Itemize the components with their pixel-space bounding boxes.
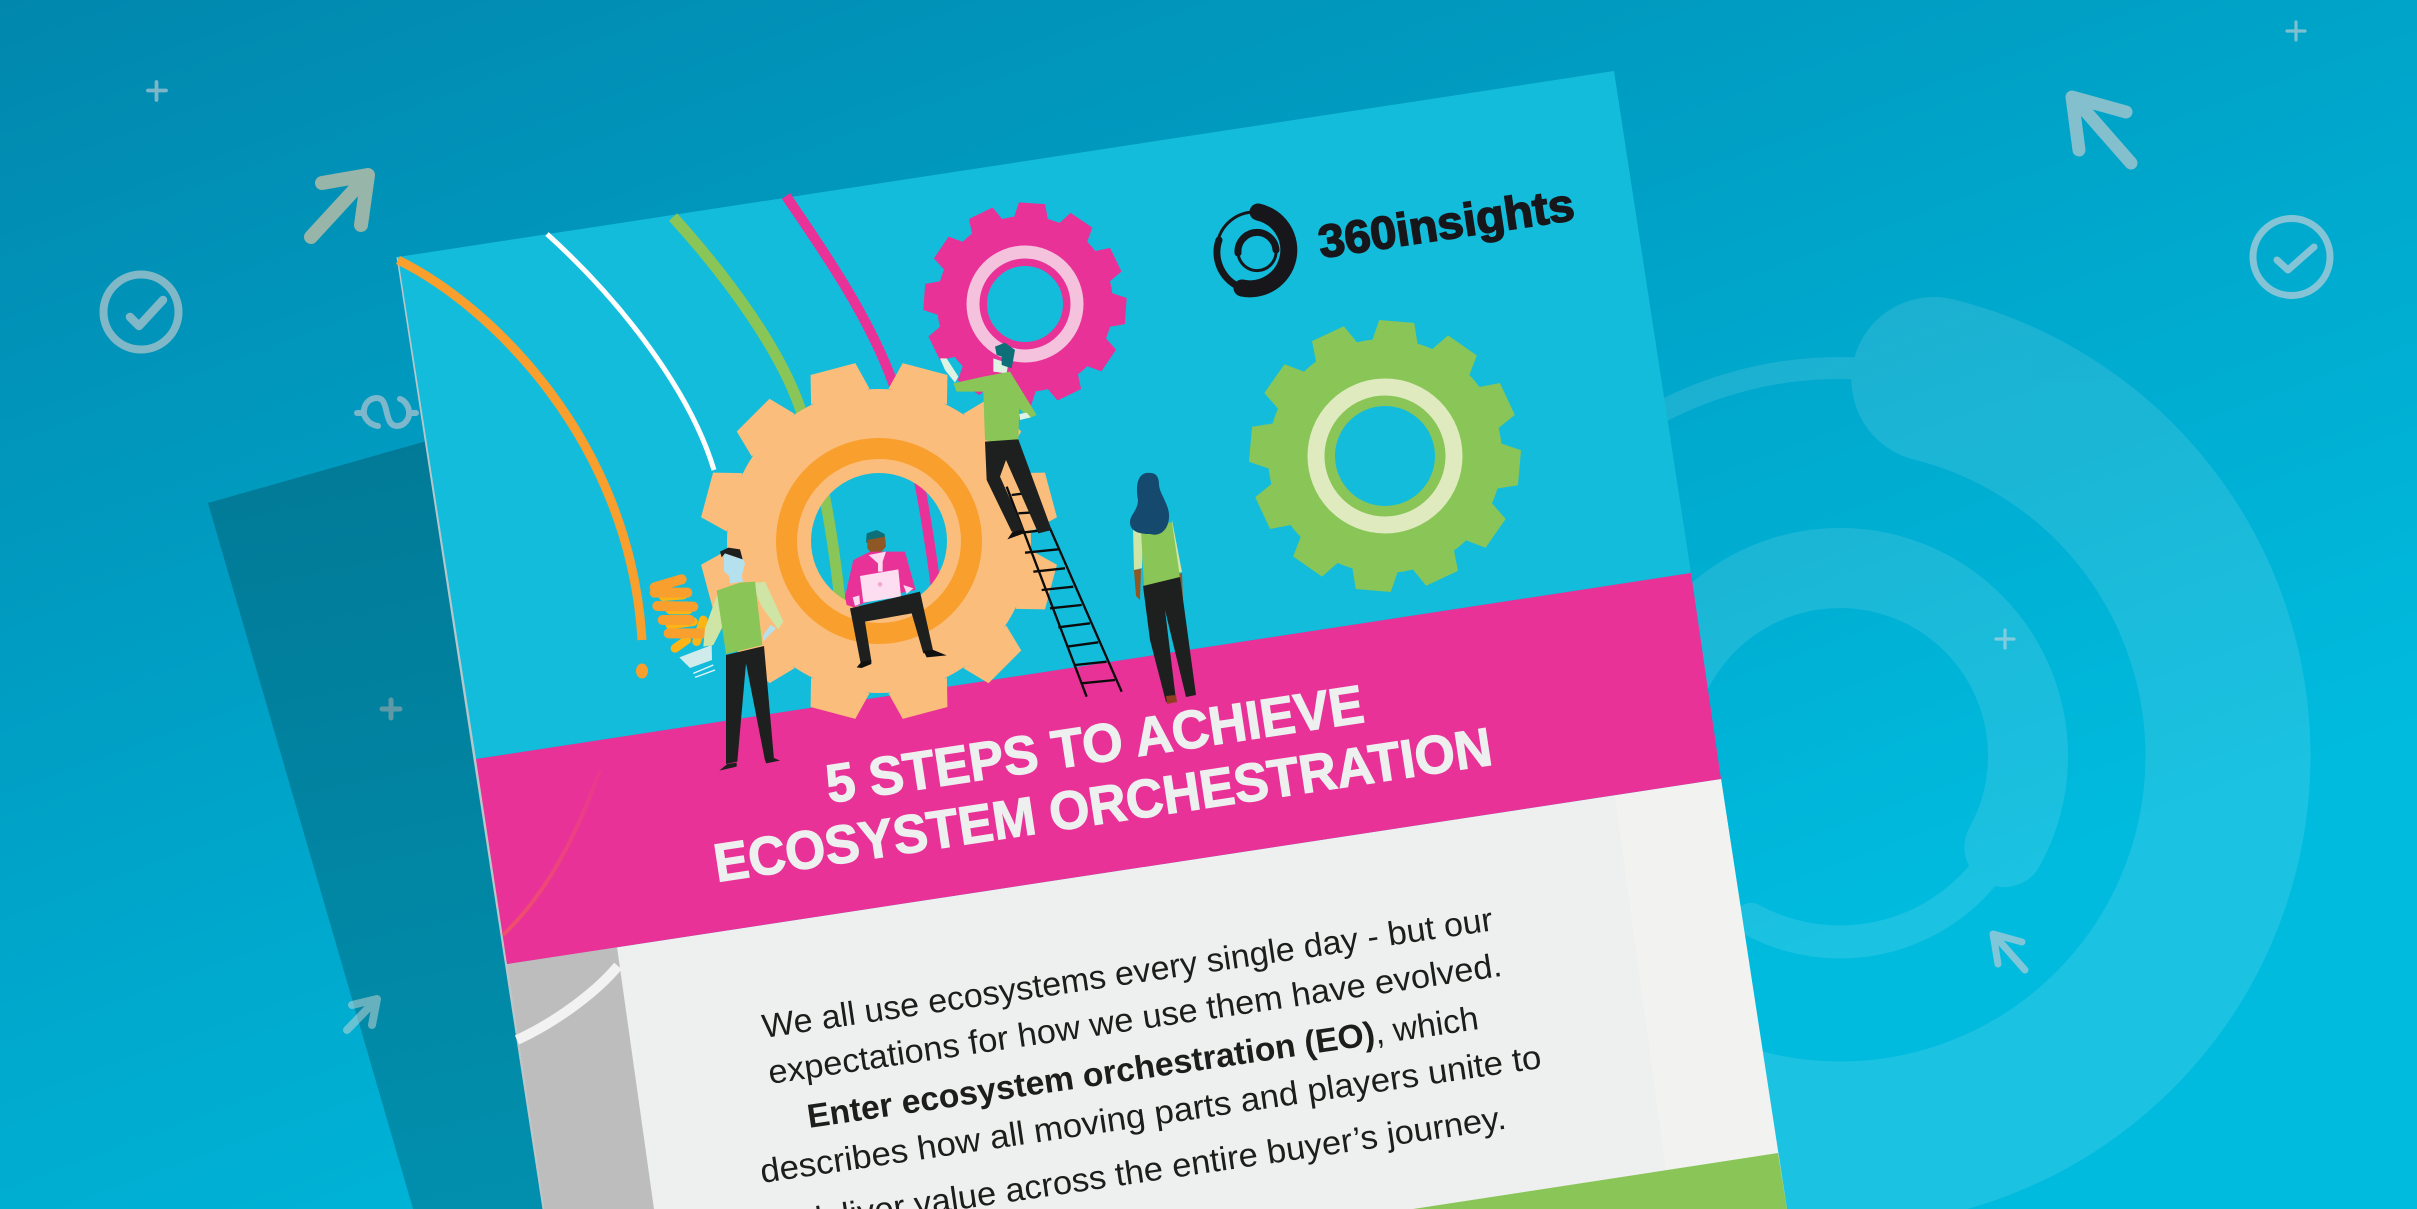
icon: squiggle bbox=[357, 398, 416, 426]
neck bbox=[993, 358, 1008, 373]
page hero: blue area bbox=[398, 71, 1691, 759]
lightbulb bbox=[655, 579, 705, 648]
hair bbox=[720, 548, 743, 559]
document page bbox=[398, 71, 1787, 1209]
page shadow bbox=[208, 440, 560, 1209]
face bbox=[867, 537, 886, 553]
trousers bbox=[850, 592, 933, 663]
line 2: expectations for how we use them have evolved. bbox=[766, 947, 1504, 1092]
decorative arc: white bbox=[547, 234, 714, 470]
hair bbox=[1130, 473, 1169, 535]
icon: plus top left bbox=[148, 82, 166, 100]
page edge bbox=[398, 257, 544, 1209]
icon: arrow top left bbox=[311, 175, 368, 237]
watermark: 360 logo rings bbox=[1620, 368, 2228, 1144]
arc on grey strip bbox=[517, 966, 618, 1040]
vest bbox=[717, 582, 762, 654]
top bbox=[1141, 522, 1180, 586]
line 3: Enter ecosystem orchestration (EO), which bbox=[805, 1000, 1481, 1136]
intro text block bbox=[758, 902, 1544, 1209]
raised hand bbox=[940, 358, 958, 383]
green footer band bbox=[1413, 1153, 1787, 1209]
icon: small arrow on shadow bbox=[347, 999, 377, 1030]
logo wordmark: 360insights bbox=[1315, 178, 1578, 268]
logo mark bbox=[1217, 212, 1289, 289]
hands bbox=[853, 595, 860, 606]
gear: green bbox=[1239, 310, 1531, 602]
person: seated man with laptop bbox=[845, 530, 947, 668]
sleeves bbox=[703, 592, 723, 647]
magenta title band bbox=[476, 573, 1721, 964]
decorative arc: green bbox=[673, 217, 842, 620]
line 1: We all use ecosystems every single day - but our bbox=[760, 902, 1495, 1046]
icon: small arrow right bbox=[1993, 934, 2025, 970]
trousers bbox=[1143, 577, 1196, 702]
gear: pink bbox=[917, 196, 1133, 412]
faint orange arc on band bbox=[503, 770, 600, 935]
ladder bbox=[1007, 487, 1122, 697]
sweater bbox=[953, 372, 1037, 445]
trousers bbox=[985, 439, 1052, 533]
hair bbox=[866, 530, 885, 543]
sleeves bbox=[1133, 527, 1143, 570]
logo: 360insights bbox=[1217, 178, 1578, 289]
person: man with lightbulb bbox=[655, 548, 783, 771]
laptop bbox=[860, 569, 901, 603]
person: climber on ladder bbox=[940, 343, 1052, 539]
hand bbox=[1019, 413, 1031, 420]
decorative arc: magenta bbox=[786, 196, 940, 620]
person: woman standing bbox=[1130, 473, 1196, 704]
icon: arrow top right bbox=[2072, 97, 2131, 163]
arms bbox=[1134, 569, 1141, 600]
head bbox=[724, 553, 745, 583]
icon: plus on shadow bbox=[382, 700, 400, 718]
title: 5 steps to achieve ecosystem orchestration bbox=[710, 674, 1496, 894]
icon: check circle left bbox=[104, 274, 178, 350]
icon: check circle right bbox=[2253, 218, 2330, 296]
title line 1: 5 STEPS TO ACHIEVE bbox=[822, 674, 1368, 815]
trousers bbox=[726, 646, 774, 764]
orange dot bbox=[636, 664, 648, 678]
page body: light area bbox=[507, 779, 1787, 1209]
collar bbox=[869, 552, 886, 572]
icon: plus on ring bbox=[1996, 630, 2014, 648]
title line 2: ECOSYSTEM ORCHESTRATION bbox=[710, 717, 1496, 894]
hair bbox=[995, 343, 1015, 368]
gear: peach bbox=[661, 323, 1097, 759]
grey strip bbox=[507, 947, 654, 1209]
line 4: describes how all moving parts and players unite to bbox=[758, 1039, 1544, 1191]
page body: lighter right strip bbox=[1615, 779, 1778, 1170]
shirt bbox=[845, 552, 916, 607]
decorative arc: orange bbox=[398, 260, 642, 640]
icon: plus top right bbox=[2287, 22, 2305, 40]
